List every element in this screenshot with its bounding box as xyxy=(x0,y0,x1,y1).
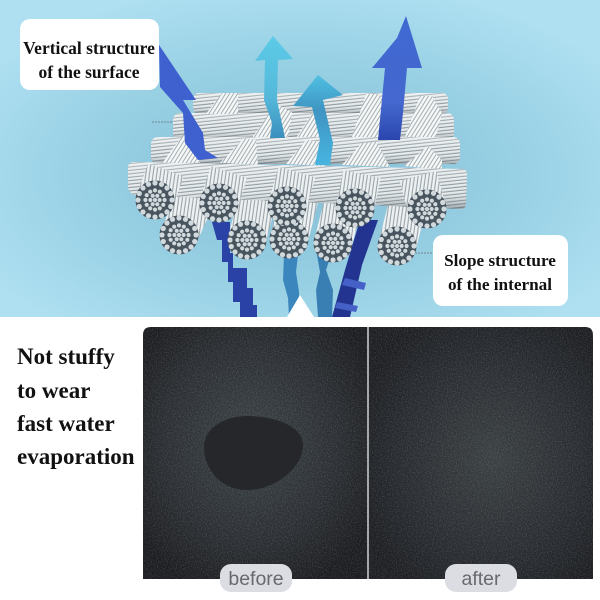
callout: vertical structure of the surface: of the surface xyxy=(38,62,140,82)
fibre weave cables xyxy=(128,93,467,266)
label: after: after xyxy=(461,568,501,590)
heading: not stuffy to wear, fast water evaporation: evaporation xyxy=(17,444,135,469)
front cable ends with strand cross-sections xyxy=(135,170,447,229)
wet spot xyxy=(204,416,303,490)
heading: not stuffy to wear, fast water evaporation: fast water xyxy=(17,411,115,436)
callout: vertical structure of the surface xyxy=(20,19,159,90)
arrow: light blue centre xyxy=(255,36,293,138)
back cable row 1 xyxy=(193,93,448,114)
label: after xyxy=(445,564,517,592)
cross-strands, middle rows xyxy=(162,134,442,170)
callout: slope structure of the internal xyxy=(433,235,568,306)
panel: fabric before and after xyxy=(143,327,593,579)
heading: not stuffy to wear, fast water evaporation: to wear xyxy=(17,378,90,403)
heading: not stuffy to wear, fast water evaporation xyxy=(17,344,135,469)
panel: after fabric xyxy=(369,327,593,579)
arrow: dark blue left, rising to the upper left xyxy=(159,45,218,160)
photo background: blue backdrop xyxy=(0,0,600,317)
leader lines from callouts xyxy=(152,122,433,253)
callout: slope structure of the internal: Slope structure xyxy=(444,251,556,270)
lower blue strands below the weave xyxy=(212,220,378,317)
arrow: cyan centre right xyxy=(293,75,343,165)
cross-strands, back rows xyxy=(206,93,442,138)
white bottom section xyxy=(0,317,600,600)
lower cable bodies and ends xyxy=(159,196,417,266)
front cable row 4 xyxy=(128,162,467,209)
arrow: royal blue right xyxy=(372,16,422,140)
cable row 3 xyxy=(151,137,460,164)
callout: vertical structure of the surface: Vertical structure xyxy=(23,38,155,58)
cable row 2 xyxy=(173,113,454,140)
callout: slope structure of the internal: of the internal xyxy=(448,275,552,294)
heading: not stuffy to wear, fast water evaporation: Not stuffy xyxy=(17,344,115,369)
label: before: before xyxy=(228,568,284,590)
label: before xyxy=(220,564,292,592)
panel: before fabric xyxy=(143,327,367,579)
white pointer triangle xyxy=(287,295,314,317)
